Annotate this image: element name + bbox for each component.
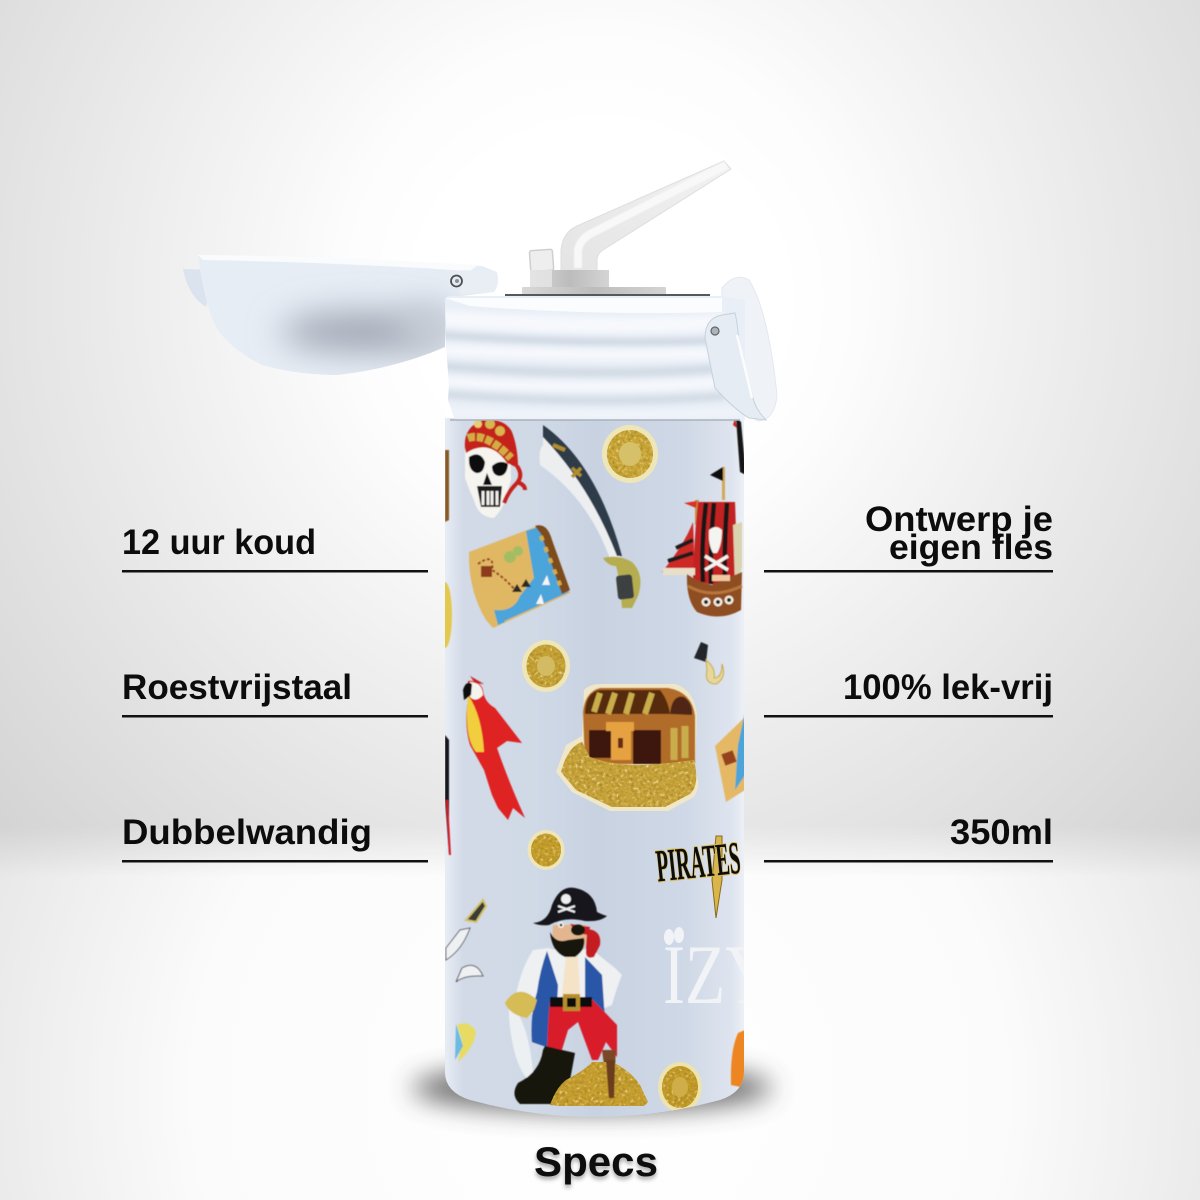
hinge clasp arm [705,313,766,420]
sticker: pirate skull [465,419,525,518]
sticker: small gold coin [528,830,564,870]
sticker: gold heap under captain [550,1060,648,1106]
sticker: cutlass sword [539,425,640,608]
sticker: pirate captain [505,888,622,1104]
sticker: gold coin [602,425,658,483]
pirate sticker pattern on bottle: PIRATES [654,832,743,891]
spec label: 100% lek-vrij: 100% lek-vrij [843,668,1053,707]
bottle ground shadow [412,1064,772,1112]
spec label: Ontwerp je eigen fles: Ontwerp je [865,500,1053,539]
spec label: Dubbelwandig: Dubbelwandig [122,813,372,852]
footer title: Specs: Specs [534,1138,658,1185]
spec label: 350ml: 350ml [950,813,1053,852]
pirate sticker pattern on bottle [445,420,744,1110]
sticker: gold coin [522,640,570,692]
sticker: treasure chest [583,688,695,764]
sticker: treasure chest outline [556,684,698,811]
sticker: treasure map [469,525,570,628]
sticker: pirate ship [662,467,742,617]
brand mark on bottle: IZY [663,928,773,1022]
bottle body [445,418,744,1117]
spec label: 12 uur koud: 12 uur koud [122,523,316,562]
spec label: Ontwerp je eigen fles [764,500,1053,572]
sticker: second treasure map [715,712,745,802]
hinge disc behind collar [722,277,777,421]
sticker: pirates logo [654,832,743,918]
brand mark on bottle [664,927,740,1003]
bottle lid, opened [183,255,498,375]
spec label: Roestvrijstaal: Roestvrijstaal [122,668,352,707]
sticker: parrot [463,676,525,820]
spec label: Ontwerp je eigen fles: eigen fles [889,528,1053,567]
straw and steel spout [505,161,731,296]
sticker: gold heap [561,742,696,807]
wrapped stickers at bottle edges [438,418,746,1088]
bottle collar with ribs [440,296,745,420]
sticker: captain hook [694,642,724,684]
sticker: gold coin at base [658,1062,702,1112]
